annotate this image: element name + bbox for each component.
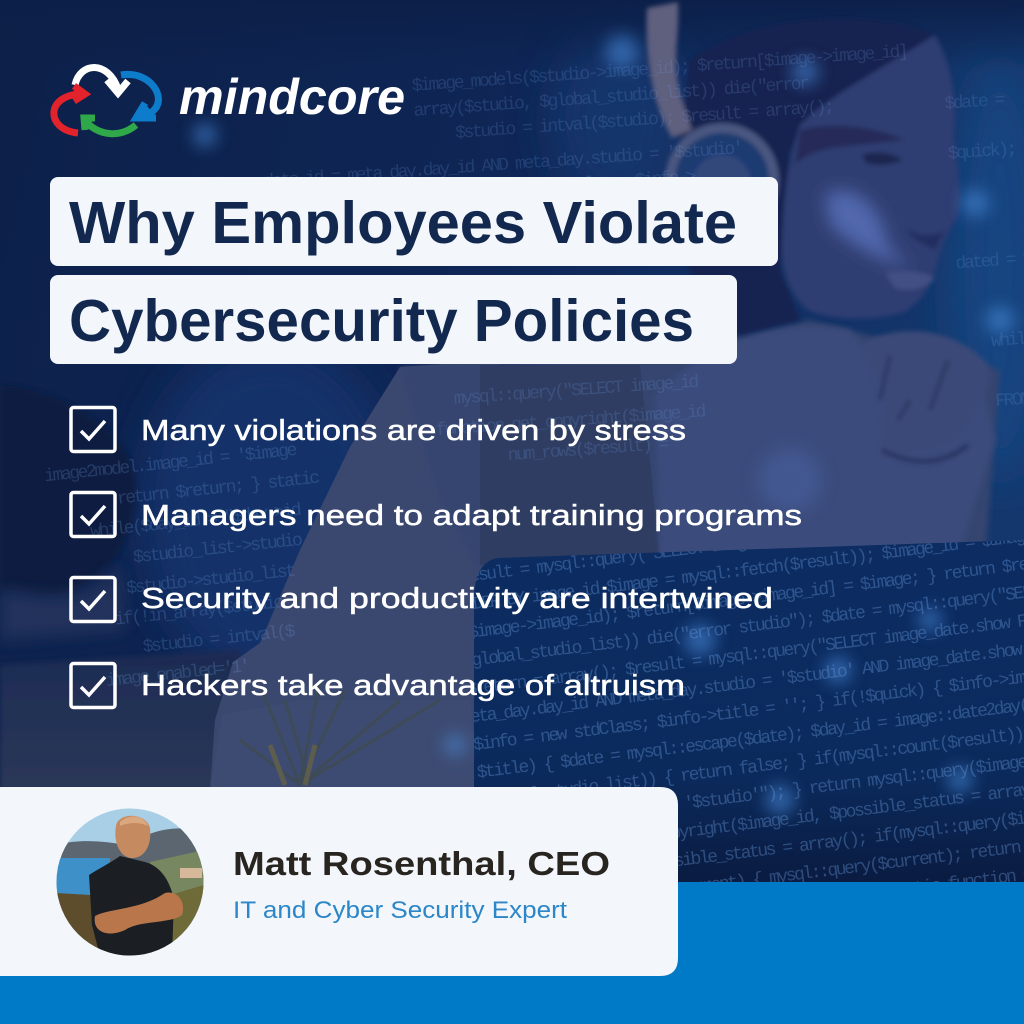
portrait photo (56, 808, 204, 956)
portrait of woman (647, 2, 989, 461)
checklist (71, 408, 802, 708)
laptop screen (474, 540, 1024, 885)
code overlay top: $image_models($studio->image_id); $return[$image->image_id] (411, 42, 907, 97)
title (50, 177, 778, 364)
code overlay on laptop: $result = mysql::query("SELECT image.id as image_id FROM image WHERE 1 (452, 497, 1024, 589)
author card (0, 787, 678, 976)
background photo: woman at laptop with code overlay: $studio->studio_list (126, 562, 295, 599)
item 2 (71, 492, 802, 536)
code overlay on laptop: ORDER BY image_id $image = mysql::fetch($result)); $image_id = $image; (455, 525, 1024, 617)
blue footer band (0, 882, 1024, 1024)
item 4: Hackers take advantage of altruism (141, 670, 685, 702)
face (782, 35, 960, 319)
item 3 (71, 578, 773, 622)
item 4 (71, 664, 685, 708)
name: Matt Rosenthal, CEO (233, 846, 610, 883)
title line 2: Cybersecurity Policies (69, 288, 694, 354)
code overlay on laptop (474, 540, 1024, 882)
background photo: woman at laptop with code overlay: image_enabled='1' (105, 657, 249, 692)
title line 1: Why Employees Violate (69, 190, 737, 256)
code overlay top: $date = (944, 91, 1005, 115)
icon: cloud of four arrows (54, 67, 158, 134)
code overlay top: num_rows($result) = (507, 435, 669, 466)
title line 2 (50, 275, 737, 364)
logo (54, 67, 405, 134)
hair (674, 19, 952, 335)
background photo: woman at laptop with code overlay: image2model.image_id = '$image (43, 441, 298, 487)
background photo: woman at laptop with code overlay: if(!in_array($studio (114, 593, 285, 631)
code overlay top: $quick); (947, 140, 1016, 165)
bokeh lights (193, 35, 1014, 815)
background photo: woman at laptop with code overlay: while($day_id = "$day->id (89, 501, 302, 543)
code overlay top (207, 33, 1024, 485)
background photo: woman at laptop with code overlay: $studio = intval($ (142, 622, 297, 658)
headphones (647, 2, 692, 138)
title line 1 (50, 177, 778, 266)
item 3: Security and productivity are intertwined (141, 583, 773, 615)
wordmark: mindcore (179, 69, 405, 125)
code overlay top: function get_copyright($image_id (435, 402, 706, 441)
code overlay top: $studio = intval($studio); $result = array(); (455, 98, 833, 144)
code overlay top: image_date.id = meta_day.day_id AND meta_day.studio = '$studio' (213, 139, 742, 196)
role: IT and Cyber Security Expert (233, 897, 567, 924)
item 1 (71, 408, 686, 452)
neck and hand (860, 331, 989, 460)
item 2: Managers need to adapt training programs (141, 500, 802, 532)
code overlay top: mysql::query("SELECT image_id (453, 373, 699, 410)
background photo: woman at laptop with code overlay: return $return; } static (116, 469, 320, 510)
plant (240, 680, 440, 785)
code overlay top: $day_id; } else { $info = new stdClass; $info-> (299, 167, 696, 215)
background photo: woman at laptop with code overlay: $studio_list->studio (132, 531, 303, 568)
item 1: Many violations are driven by stress (141, 415, 686, 447)
code overlay top: array($studio, $global_studio_list)) die("error (413, 74, 810, 122)
